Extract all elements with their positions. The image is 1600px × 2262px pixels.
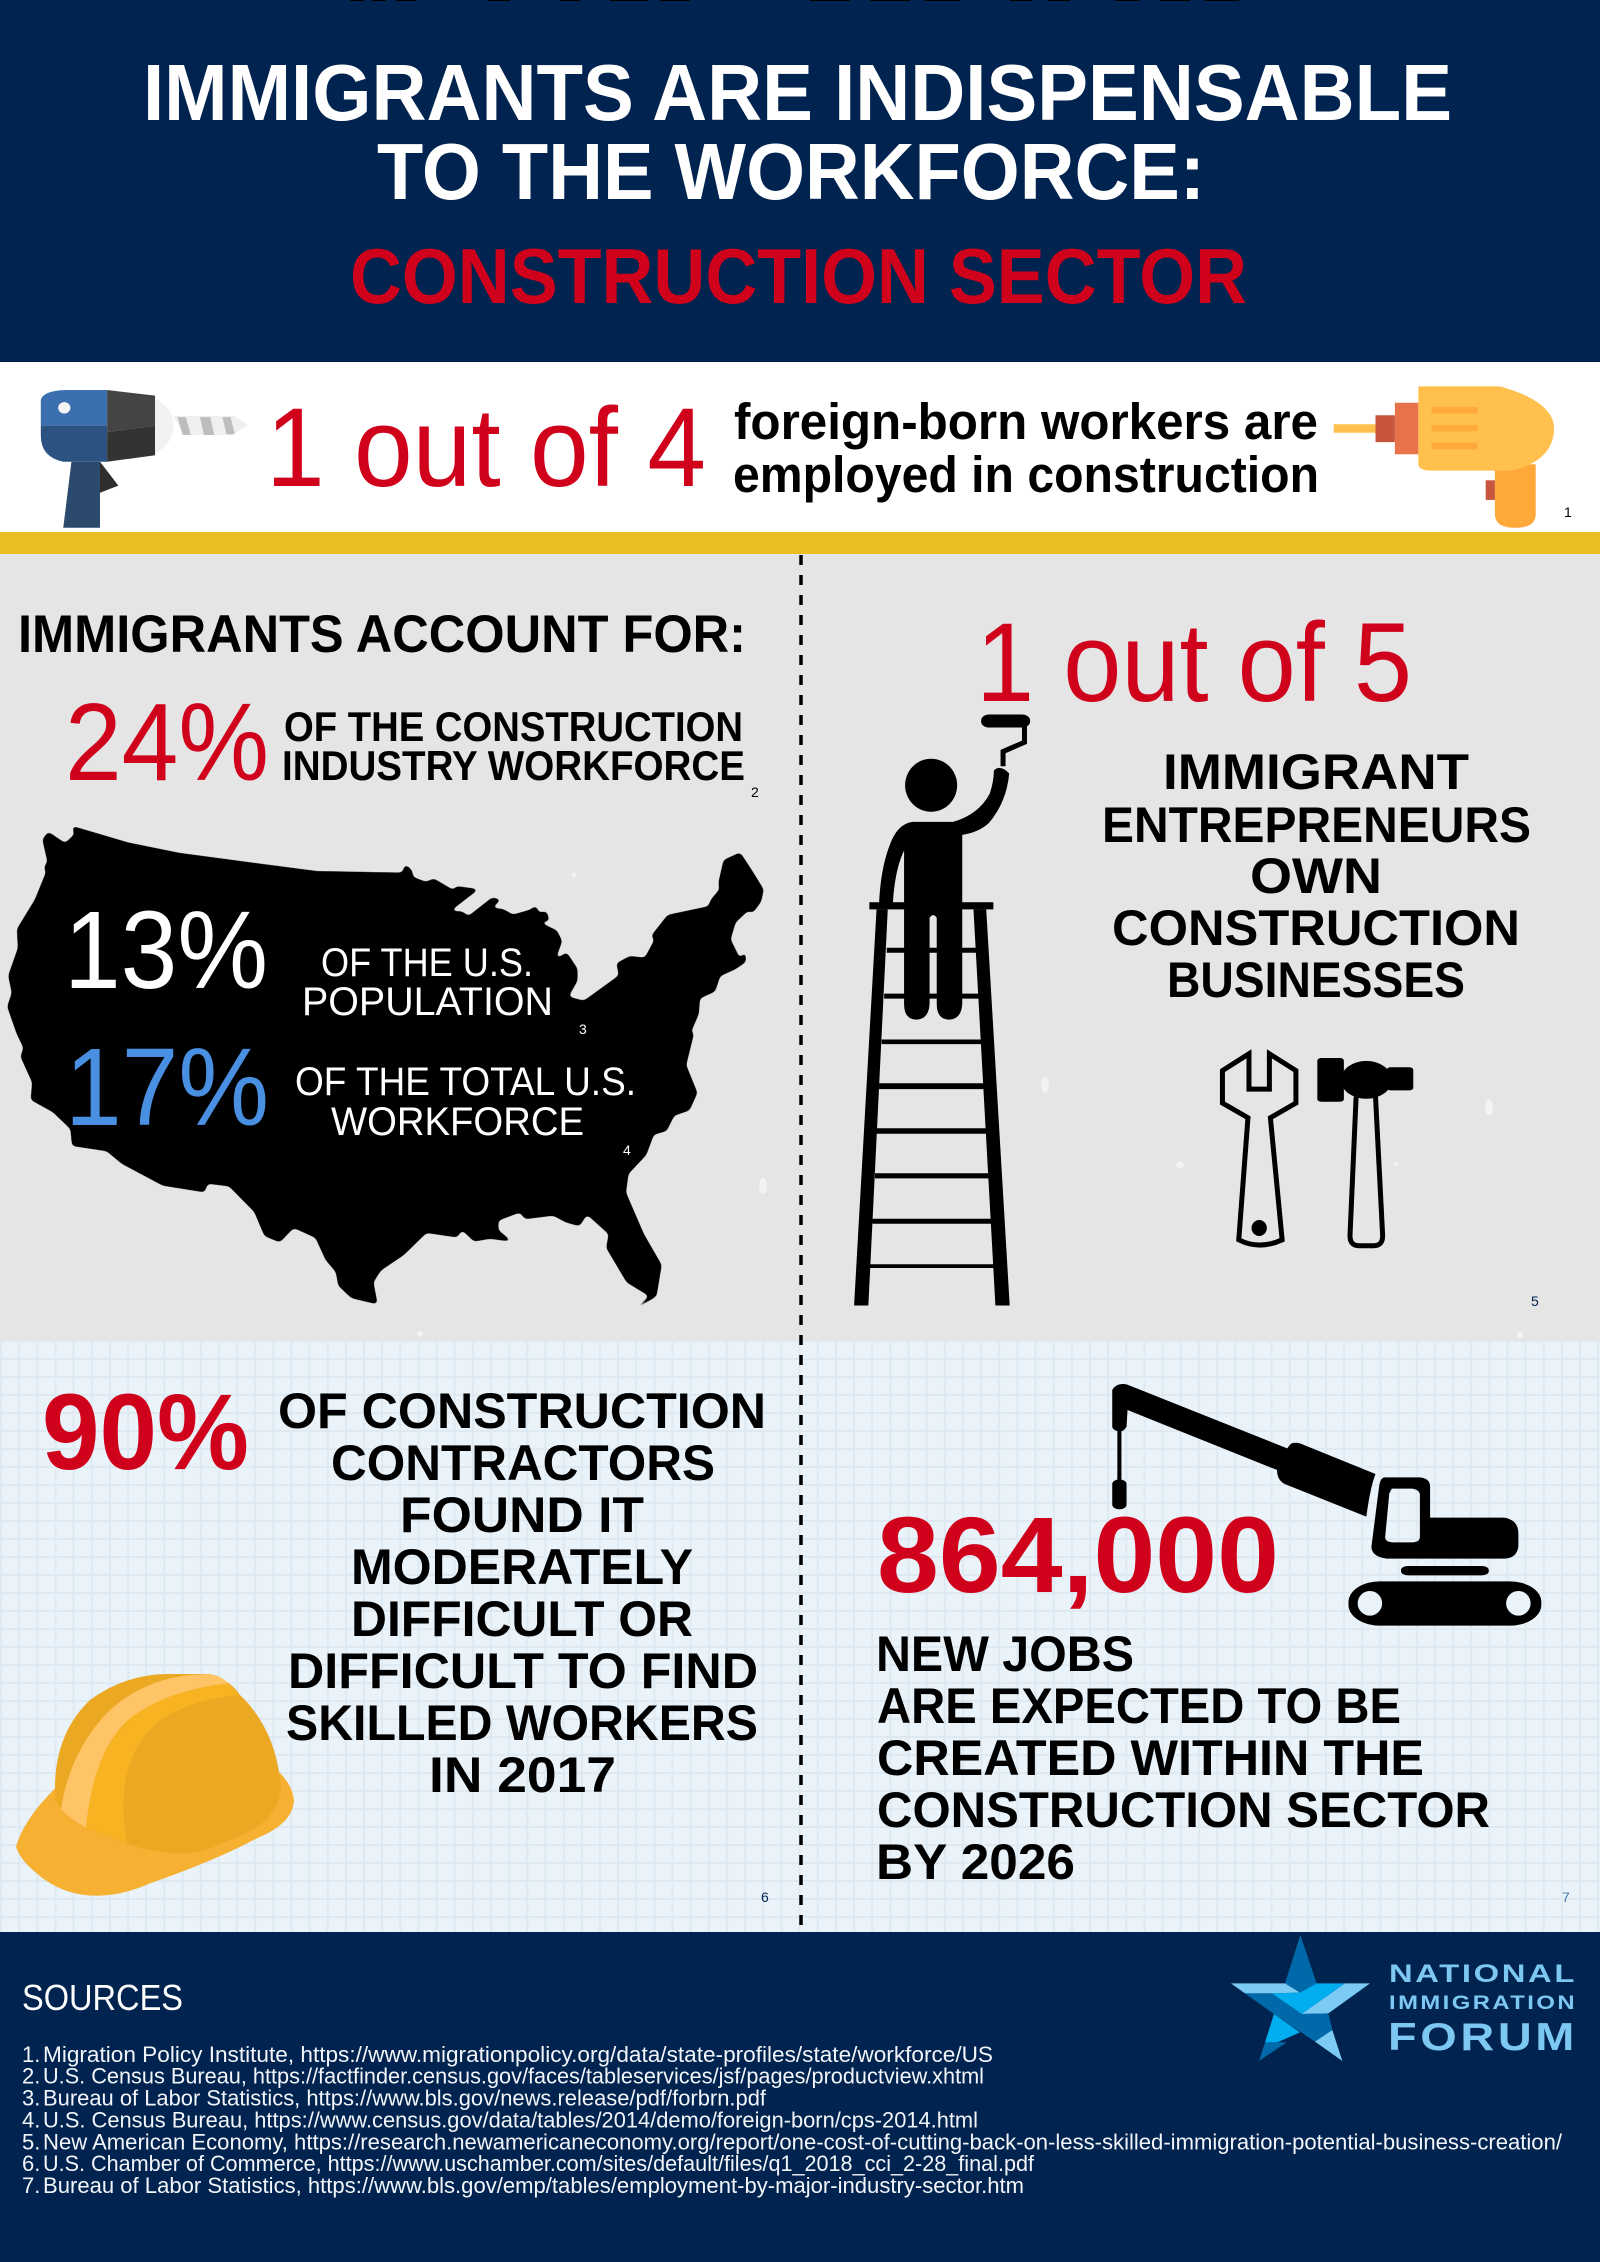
footnote 7: 7: [1562, 1889, 1570, 1905]
logo: National Immigration Forum: [1231, 1935, 1578, 2061]
panel: grid background: [0, 1340, 1600, 1932]
icon: wrench: [1222, 1054, 1296, 1245]
panel: 1 out of 4 band: [0, 362, 1600, 532]
title: [143, 48, 1452, 320]
text: source list: U.S. Census Bureau, https://factfinder.census.gov/faces/tableservices/jsf/pages/productview.xhtml: [43, 2064, 984, 2088]
icon: blue power drill: [41, 390, 248, 528]
text: new jobs expected by 2026: BY 2026: [876, 1834, 1075, 1890]
text: immigrant entrepreneurs own construction businesses: ENTREPRENEURS: [1102, 797, 1531, 853]
text: foreign-born workers: [733, 393, 1319, 503]
panel: immigrants account for: [8, 605, 763, 1309]
title: TO THE WORKFORCE:: [377, 127, 1205, 216]
text: immigrant entrepreneurs own construction businesses: OWN: [1250, 848, 1382, 904]
text: source list: [22, 2042, 1563, 2198]
text: source list: 2.: [22, 2064, 40, 2088]
text: contractors found it difficult: IN 2017: [429, 1747, 616, 1803]
icon: excavator: [1112, 1384, 1541, 1626]
text: of the total U.S. workforce: WORKFORCE: [331, 1100, 584, 1144]
stat: 24 percent: 24%: [65, 681, 269, 804]
text: contractors found it difficult: DIFFICULT OR: [351, 1591, 693, 1647]
yellow divider band: [0, 532, 1600, 554]
heading: immigrants account for: IMMIGRANTS ACCOUNT FOR:: [18, 605, 746, 664]
text: foreign-born workers: foreign-born workers are: [734, 393, 1318, 450]
footnote 6: 6: [761, 1889, 769, 1905]
text: of the U.S. population: [302, 941, 553, 1024]
text: source list: U.S. Census Bureau, https://www.census.gov/data/tables/2014/demo/foreign-born/cps-2014.html: [43, 2108, 978, 2132]
text: immigrant entrepreneurs own construction businesses: IMMIGRANT: [1163, 744, 1469, 800]
text: source list: New American Economy, https://research.newamericaneconomy.org/report/one-cost-of-cutting-back-on-less-skilled-immigration-potential-business-creation/: [43, 2130, 1563, 2154]
text: source list: 4.: [22, 2108, 40, 2132]
footnote 4: 4: [623, 1142, 631, 1158]
icon: painter on ladder: [854, 715, 1030, 1305]
text: of the U.S. population: POPULATION: [302, 980, 553, 1024]
panel: 864,000 new jobs: [876, 1384, 1570, 1905]
stat: 17 percent: 17%: [65, 1026, 269, 1149]
heading: sources: SOURCES: [22, 1977, 183, 2018]
icon: logo star: [1231, 1935, 1370, 2061]
title: IMMIGRANTS ARE INDISPENSABLE: [143, 48, 1452, 137]
text: source list: Bureau of Labor Statistics, https://www.bls.gov/emp/tables/employment-by-major-industry-sector.htm: [43, 2173, 1024, 2198]
text: foreign-born workers: employed in construction: [733, 446, 1319, 503]
title: CONSTRUCTION SECTOR: [350, 232, 1247, 320]
logo: National Immigration Forum: FORUM: [1388, 2016, 1578, 2059]
footnote 2: 2: [751, 784, 759, 800]
text: of the construction industry workforce: [282, 703, 745, 789]
logo: National Immigration Forum: IMMIGRATION: [1389, 1992, 1577, 2014]
text: new jobs expected by 2026: CONSTRUCTION SECTOR: [877, 1782, 1490, 1838]
stat: 13 percent: 13%: [64, 889, 268, 1012]
icon: hammer: [1317, 1058, 1413, 1246]
text: contractors found it difficult: OF CONSTRUCTION: [278, 1383, 766, 1439]
text: source list: U.S. Chamber of Commerce, https://www.uschamber.com/sites/default/files/q1_2018_cci_2-28_final.pdf: [43, 2151, 1035, 2176]
text: contractors found it difficult: FOUND IT: [400, 1487, 644, 1543]
text: of the U.S. population: OF THE U.S.: [321, 941, 533, 985]
text: contractors found it difficult: MODERATELY: [351, 1539, 693, 1595]
text: immigrant entrepreneurs own construction businesses: [1102, 744, 1531, 1008]
text: of the construction industry workforce: INDUSTRY WORKFORCE: [282, 742, 745, 789]
text: new jobs expected by 2026: NEW JOBS: [876, 1626, 1134, 1682]
stat: 90 percent: 90%: [42, 1371, 249, 1492]
text: source list: 5.: [22, 2130, 40, 2154]
text: immigrant entrepreneurs own construction businesses: BUSINESSES: [1167, 952, 1465, 1008]
panel: immigrant entrepreneurs: [854, 600, 1539, 1309]
text: of the total U.S. workforce: OF THE TOTAL U.S.: [295, 1060, 636, 1104]
text: contractors found it difficult: [278, 1383, 766, 1803]
text: of the construction industry workforce: OF THE CONSTRUCTION: [284, 703, 743, 750]
text: source list: Migration Policy Institute, https://www.migrationpolicy.org/data/state-profiles/state/workforce/US: [43, 2042, 993, 2067]
text: immigrant entrepreneurs own construction businesses: CONSTRUCTION: [1112, 900, 1520, 956]
text: source list: 7.: [22, 2173, 40, 2198]
text: new jobs expected by 2026: CREATED WITHIN THE: [877, 1730, 1424, 1786]
text: new jobs expected by 2026: ARE EXPECTED TO BE: [877, 1678, 1401, 1734]
map: United States silhouette: [8, 827, 763, 1309]
footnote 5: 5: [1531, 1293, 1539, 1309]
panel: sources: [22, 1935, 1578, 2198]
text: source list: 6.: [22, 2151, 40, 2176]
text: source list: 1.: [22, 2042, 40, 2067]
panel: footer background: [0, 1932, 1600, 2262]
stat: 864,000: 864,000: [877, 1494, 1279, 1615]
stat: 1 out of 4: 1 out of 4: [266, 385, 706, 510]
vertical dashed divider: [799, 555, 803, 1932]
panel: grey statistics background: [0, 554, 1600, 1340]
text: of the total U.S. workforce: [295, 1060, 636, 1144]
text: contractors found it difficult: SKILLED WORKERS: [286, 1695, 758, 1751]
text: source list: Bureau of Labor Statistics, https://www.bls.gov/news.release/pdf/forbrn.pdf: [43, 2086, 767, 2110]
icon: hard hat: [16, 1674, 294, 1896]
text: contractors found it difficult: CONTRACTORS: [331, 1435, 715, 1491]
text: source list: 3.: [22, 2086, 40, 2110]
footnote 3: 3: [579, 1021, 587, 1037]
footnote 1: 1: [1564, 504, 1572, 520]
logo: National Immigration Forum: NATIONAL: [1389, 1960, 1577, 1988]
panel: 90 percent of contractors: [16, 1371, 769, 1905]
text: contractors found it difficult: DIFFICULT TO FIND: [288, 1643, 758, 1699]
header band: [0, 0, 1600, 362]
icon: yellow power drill: [1334, 386, 1554, 528]
text: new jobs expected by 2026: [876, 1626, 1490, 1890]
stat: 1 out of 5: 1 out of 5: [976, 600, 1412, 725]
